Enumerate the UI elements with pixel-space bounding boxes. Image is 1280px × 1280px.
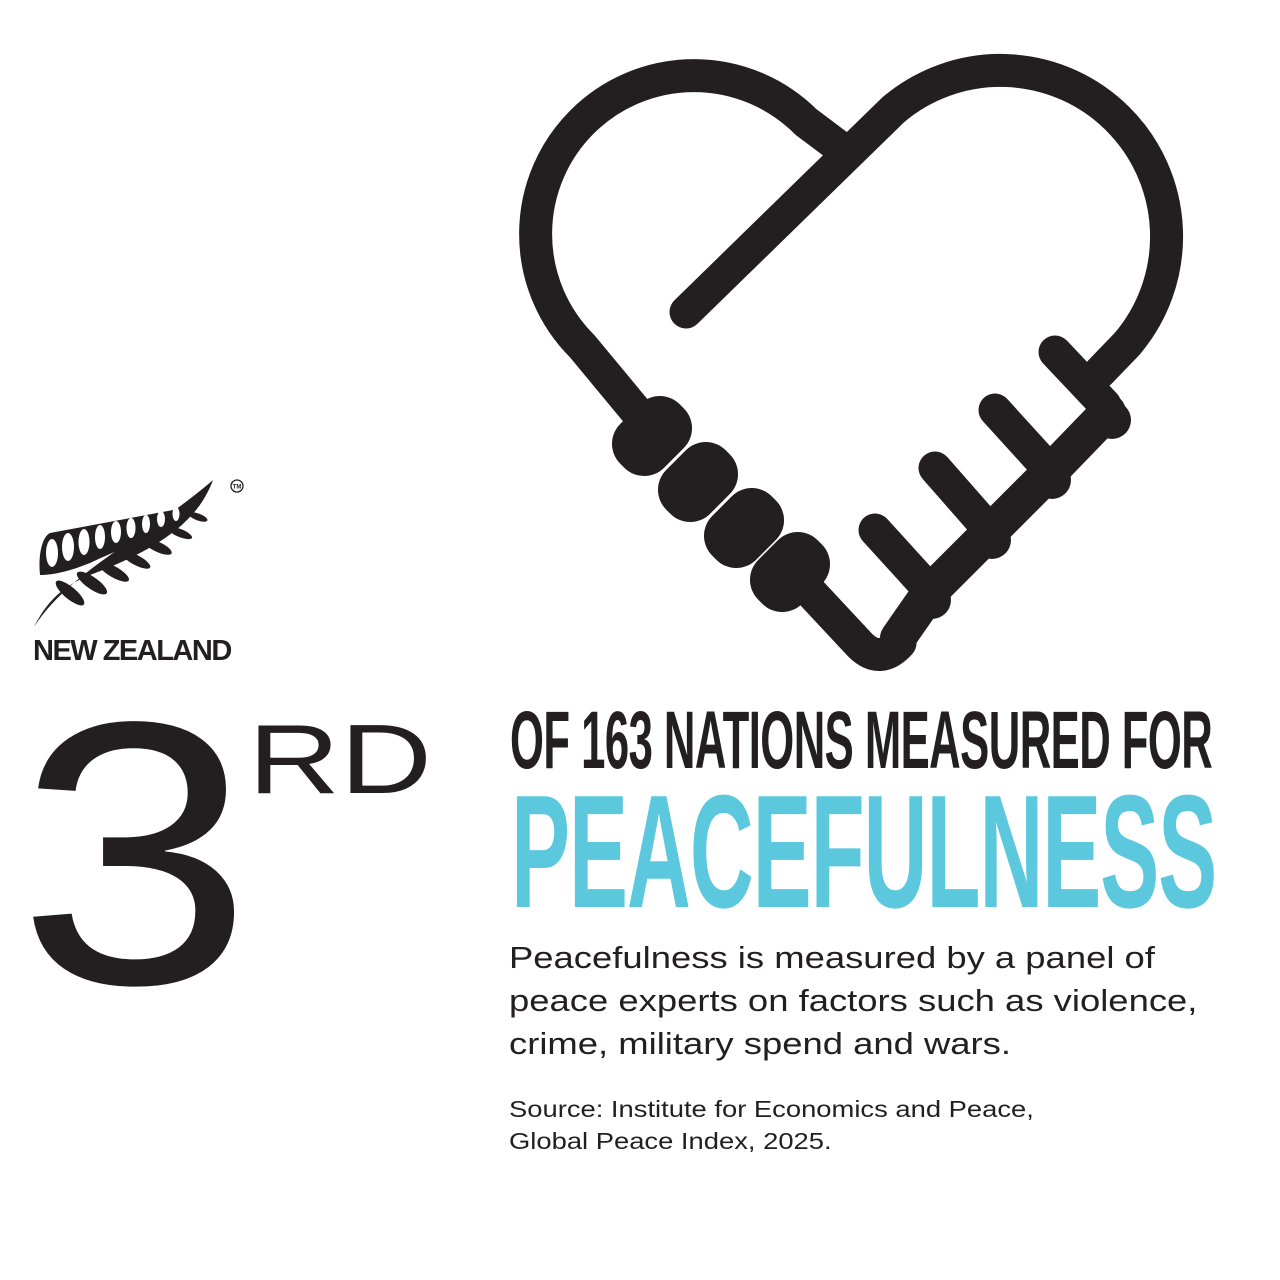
- icon: heart handshake: [519, 54, 1184, 671]
- number 3: 3: [17, 645, 253, 1063]
- heading: PEACEFULNESS: PEACEFULNESS: [511, 762, 1216, 942]
- description paragraph: crime, military spend and wars.: [509, 1026, 1011, 1061]
- description paragraph: Peacefulness is measured by a panel of: [509, 940, 1155, 975]
- left arm bottom: [790, 570, 900, 655]
- knuckle blobs: [600, 384, 842, 624]
- right lobe with thumb line: [686, 70, 1167, 372]
- description paragraph: [509, 940, 1197, 1061]
- superscript RD: RD: [248, 704, 432, 814]
- icon: silver fern: [34, 479, 244, 627]
- source note: Source: Institute for Economics and Peace,: [509, 1096, 1034, 1122]
- logo text: NEW ZEALAND: [33, 635, 231, 667]
- description paragraph: peace experts on factors such as violence,: [509, 983, 1197, 1018]
- right hand fingers: [1055, 352, 1105, 405]
- source note: Global Peace Index, 2025.: [509, 1128, 832, 1154]
- big rank number: [17, 645, 432, 1063]
- icon: silver fern: TM: [233, 484, 241, 490]
- left lobe and left arm: [536, 76, 846, 428]
- cuff band of right hand: [898, 412, 1108, 638]
- logo: New Zealand fern: [33, 479, 244, 667]
- source note: [509, 1096, 1034, 1154]
- heading line 1: OF 163 NATIONS MEASURED FOR: [510, 695, 1212, 786]
